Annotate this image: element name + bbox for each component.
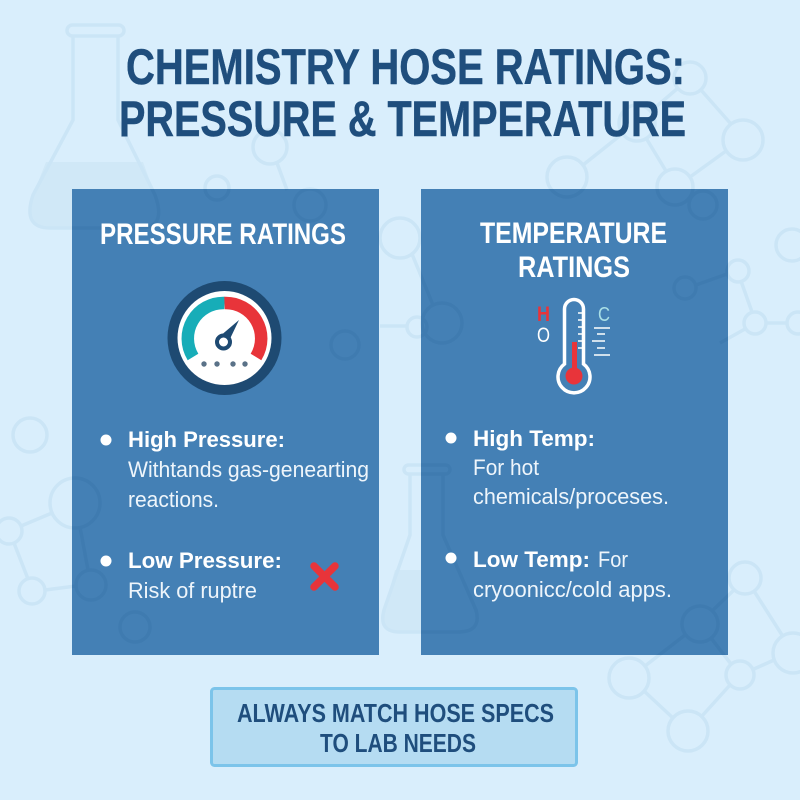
- icon: thermometer: H: [537, 303, 550, 326]
- icon: thermometer: [537, 300, 610, 393]
- icon: thermometer: O: [537, 324, 550, 347]
- panel heading: temperature ratings: TEMPERATURE: [480, 217, 667, 250]
- bullet: low pressure: Risk of ruptre: [128, 578, 257, 603]
- bullet: high temp: [446, 426, 669, 509]
- panel: temperature ratings: [421, 189, 728, 655]
- bullet: low temp: Low Temp:: [473, 547, 590, 572]
- panel heading: pressure ratings: PRESSURE RATINGS: [100, 218, 346, 251]
- bullet: low temp: [446, 547, 672, 602]
- title: [119, 39, 686, 147]
- callout: TO LAB NEEDS: [320, 728, 476, 758]
- callout: [212, 688, 576, 766]
- bullet: high pressure: reactions.: [128, 487, 219, 512]
- bullet: high temp: High Temp:: [473, 426, 595, 451]
- icon: red cross: [314, 566, 335, 587]
- bullet: low temp: cryoonicc/cold apps.: [473, 577, 672, 602]
- bullet: high pressure: [100, 427, 369, 512]
- bullet: low pressure: Low Pressure:: [128, 548, 282, 573]
- bullet: high temp: For hot: [473, 455, 539, 480]
- bullet: high pressure: High Pressure:: [128, 427, 285, 452]
- bullet: high temp: chemicals/proceses.: [473, 484, 669, 509]
- panel heading: temperature ratings: RATINGS: [518, 251, 630, 284]
- icon: thermometer: C: [598, 304, 610, 326]
- panel: pressure ratings: [72, 189, 379, 655]
- bullet: low temp: For: [598, 547, 628, 572]
- bullet: high pressure: Withtands gas-genearting: [128, 457, 369, 482]
- callout: ALWAYS MATCH HOSE SPECS: [237, 698, 554, 728]
- panel heading: temperature ratings: [480, 217, 667, 284]
- bullet: low pressure: [100, 548, 282, 603]
- icon: pressure gauge: [168, 281, 282, 395]
